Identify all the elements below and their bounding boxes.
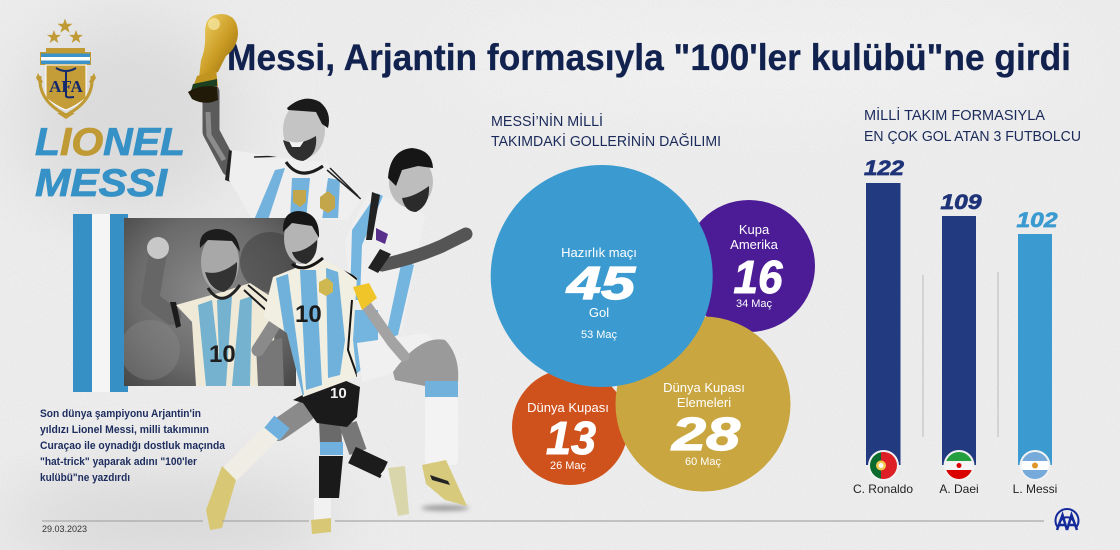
text block: intro: yıldızı Lionel Messi, milli takımının: [40, 424, 209, 436]
bar: C. Ronaldo: C. Ronaldo: [853, 482, 913, 496]
bubble: World Cup qualifiers: 28: [671, 408, 741, 460]
bubble: Copa America: Kupa: [739, 222, 770, 237]
bubble: World Cup qualifiers: Dünya Kupası: [663, 380, 745, 395]
bubble: friendlies: Hazırlık maçı: [561, 245, 637, 260]
heading: top scorers: MİLLİ TAKIM FORMASIYLA: [864, 106, 1045, 124]
text block: intro: Son dünya şampiyonu Arjantin'in: [40, 408, 201, 420]
bubble: World Cup qualifiers: Elemeleri: [677, 395, 731, 410]
bubble: World Cup qualifiers: 60 Maç: [685, 456, 722, 468]
bar: C. Ronaldo: 122: [864, 157, 904, 180]
heading: Lionel: LIONEL: [35, 121, 185, 164]
bubble: friendlies: 45: [566, 257, 637, 309]
text block: intro: "hat-trick" yaparak adını "100'ler: [40, 456, 198, 468]
heading: goals by competition: TAKIMDAKİ GOLLERİNİN DAĞILIMI: [491, 132, 721, 150]
icon: World Cup trophy: [188, 14, 238, 103]
figure: Messi in foreground: [206, 211, 409, 534]
bubble: friendlies: 53 Maç: [581, 329, 618, 341]
heading: goals by competition: MESSİ’NİN MİLLİ: [491, 112, 603, 130]
bubble: World Cup: 13: [546, 412, 596, 464]
bubble: Copa America: 16: [734, 251, 783, 303]
icon: Argentine flag stripes: [73, 214, 128, 392]
bar: L. Messi: L. Messi: [1013, 482, 1057, 496]
bar: L. Messi: 102: [1016, 209, 1058, 232]
bubble: World Cup: Dünya Kupası: [527, 400, 609, 415]
bubble: World Cup qualifiers: [616, 316, 790, 492]
icon: AFA crest: [36, 18, 96, 119]
figure: Messi lifting the trophy: [208, 92, 362, 220]
bar: A. Daei: A. Daei: [939, 482, 979, 496]
bar chart: top international scorers: [853, 157, 1058, 496]
heading: goals by competition: [491, 112, 721, 150]
photo: Messi celebrating: [120, 218, 300, 386]
heading: top scorers: [864, 106, 1081, 145]
bubble: friendlies: [491, 165, 713, 387]
text block: intro: Curaçao ile oynadığı dostluk maçında: [40, 440, 226, 452]
bubble: Copa America: 34 Maç: [736, 298, 773, 310]
photo: Messi celebrating: 10: [209, 341, 236, 368]
text block: intro: [40, 408, 226, 484]
text block: intro: kulübü"ne yazdırdı: [40, 472, 130, 484]
heading: Messi: MESSI: [35, 162, 168, 205]
bar: A. Daei: [939, 191, 982, 496]
icon: AA logo: [1056, 509, 1078, 530]
bubble: World Cup: [512, 369, 628, 485]
bubble: World Cup: 26 Maç: [550, 460, 587, 472]
bar: C. Ronaldo: [853, 157, 913, 496]
date: 29.03.2023: [42, 524, 87, 534]
bubble: friendlies: Gol: [589, 305, 609, 320]
icon: AFA crest: AFA: [49, 77, 84, 96]
figure: Messi running: [345, 148, 469, 511]
bubble: Copa America: Amerika: [730, 237, 779, 252]
bubble: Copa America: [683, 200, 815, 332]
bubble chart: goal distribution: [491, 165, 815, 492]
bar: A. Daei: 109: [940, 191, 982, 214]
heading: top scorers: EN ÇOK GOL ATAN 3 FUTBOLCU: [864, 128, 1081, 145]
bar: L. Messi: [1013, 209, 1058, 496]
figure: Messi in foreground: 10: [295, 301, 322, 328]
figure: Messi in foreground: 10: [330, 385, 347, 402]
title: Messi, Arjantin formasıyla "100'ler kulübü"ne girdi: [227, 37, 1071, 78]
